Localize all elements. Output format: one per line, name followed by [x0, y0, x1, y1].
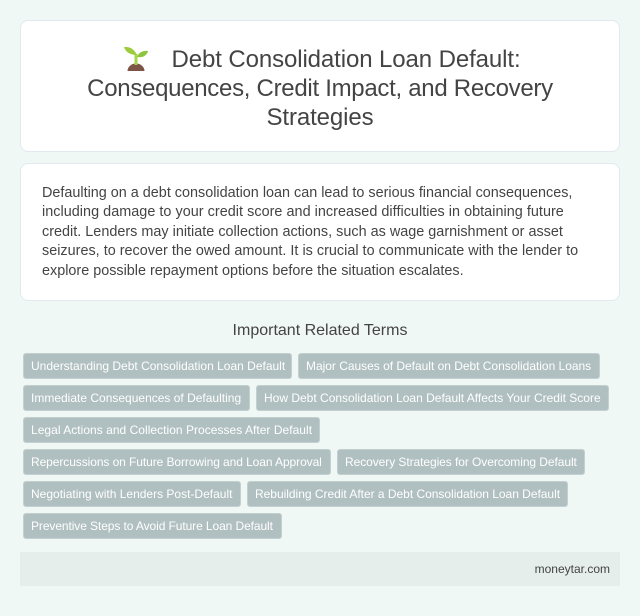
- description paragraph: [42, 185, 578, 279]
- description paragraph: Defaulting on a debt consolidation loan can lead to serious financial consequences,: [42, 185, 572, 201]
- tag: Recovery Strategies for Overcoming Default: [345, 455, 577, 469]
- tag: [247, 481, 568, 507]
- tag: Immediate Consequences of Defaulting: [31, 391, 241, 405]
- tag: Preventive Steps to Avoid Future Loan Default: [31, 519, 273, 533]
- title: Debt Consolidation Loan Default:: [171, 46, 521, 73]
- tag: [298, 353, 600, 379]
- heading: important related terms: Important Related Terms: [233, 322, 407, 339]
- tag: [23, 353, 292, 379]
- panel: related term tags: [23, 353, 609, 539]
- description paragraph: including damage to your credit score and increased difficulties in obtaining future: [42, 204, 564, 220]
- title: Consequences, Credit Impact, and Recovery: [87, 75, 553, 102]
- title: [87, 46, 553, 131]
- tag: Rebuilding Credit After a Debt Consolidation Loan Default: [255, 487, 560, 501]
- tag: Major Causes of Default on Debt Consolidation Loans: [306, 359, 591, 373]
- tag: How Debt Consolidation Loan Default Affects Your Credit Score: [264, 391, 601, 405]
- tag: [23, 417, 320, 443]
- description paragraph: credit. Lenders may initiate collection actions, such as wage garnishment or asset: [42, 224, 563, 240]
- tag: [23, 385, 250, 411]
- tag: Repercussions on Future Borrowing and Loan Approval: [31, 455, 322, 469]
- tag: [256, 385, 609, 411]
- tag: [23, 513, 282, 539]
- tag: Understanding Debt Consolidation Loan Default: [31, 359, 285, 373]
- panel: description text: [20, 163, 620, 301]
- description paragraph: explore possible repayment options before the situation escalates.: [42, 263, 464, 279]
- panel: header card: [20, 20, 620, 152]
- tag: [23, 481, 241, 507]
- tag: [337, 449, 585, 475]
- tag: Negotiating with Lenders Post-Default: [31, 487, 232, 501]
- footer source label: moneytar.com: [535, 562, 610, 576]
- tag: [23, 449, 331, 475]
- icon: sprout: [124, 47, 148, 71]
- tag: Legal Actions and Collection Processes After Default: [31, 423, 312, 437]
- footer: [20, 552, 620, 586]
- title: Strategies: [266, 104, 374, 131]
- description paragraph: seizures, to recover the owed amount. It is crucial to communicate with the lender to: [42, 243, 578, 259]
